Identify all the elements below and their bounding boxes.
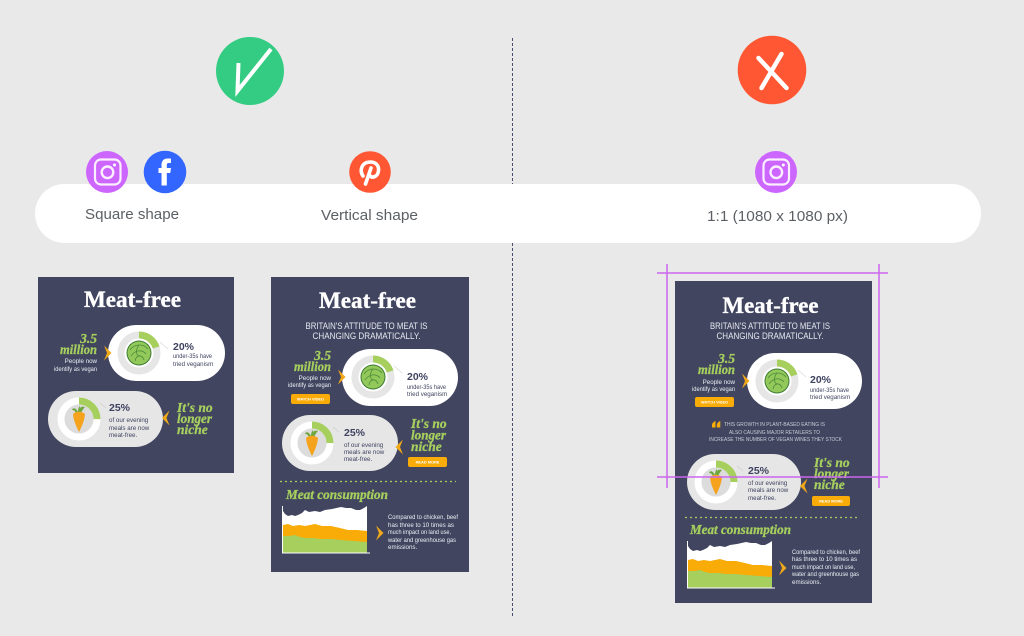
- white label band: [35, 184, 981, 243]
- card: 20 percent: [747, 353, 862, 409]
- callout: 3.5 million: [692, 351, 736, 393]
- arrow: [800, 478, 808, 494]
- card: 20 percent: [342, 349, 458, 406]
- icon: green check: [216, 37, 284, 105]
- callout: 3.5 million: identify as vegan: [692, 386, 736, 393]
- arrow: [376, 526, 384, 540]
- subheading: CHANGING DRAMATICALLY.: [716, 331, 824, 341]
- arrow: [162, 410, 170, 426]
- arrow: [779, 560, 786, 576]
- label: vertical shape: Vertical shape: [321, 208, 418, 224]
- callout: 3.5 million: million: [294, 359, 331, 374]
- callout: it's no longer niche: niche: [814, 477, 845, 492]
- panel: cropped infographic: [675, 281, 872, 603]
- panel: vertical infographic: [271, 277, 469, 572]
- text block: has three to 10 times as: [792, 556, 857, 563]
- subheading: BRITAIN'S ATTITUDE TO MEAT IS: [306, 321, 428, 331]
- subheading: CHANGING DRAMATICALLY.: [312, 331, 420, 341]
- card: 20 percent: [108, 325, 225, 381]
- button: watch video: [291, 394, 330, 404]
- text block: emissions.: [792, 579, 822, 586]
- callout: it's no longer niche: [813, 455, 850, 492]
- card: 20 percent: under-35s have: [810, 387, 850, 394]
- crop guides: [657, 264, 888, 488]
- card: 25 percent: 25%: [748, 465, 770, 477]
- card: 20 percent: under-35s have: [407, 384, 447, 391]
- pull quote: INCREASE THE NUMBER OF VEGAN WINES THEY STOCK: [709, 437, 843, 443]
- arrow: [338, 370, 346, 384]
- callout: it's no longer niche: It's no: [813, 455, 850, 470]
- pull quote: THIS GROWTH IN PLANT-BASED EATING IS: [724, 422, 826, 428]
- card: 25 percent: [48, 391, 163, 447]
- text block: Compared to chicken, beef: [388, 514, 458, 521]
- text block: emissions.: [388, 544, 418, 551]
- pull quote: [709, 421, 843, 443]
- callout: 3.5 million: [288, 348, 332, 389]
- callout: 3.5 million: People now: [703, 379, 736, 386]
- card: 25 percent: 25%: [109, 402, 131, 414]
- card: 25 percent: of our evening: [109, 417, 149, 424]
- card: 25 percent: [687, 454, 801, 510]
- label: 1:1 size: 1:1 (1080 x 1080 px): [707, 209, 848, 225]
- text block: water and greenhouse gas: [791, 571, 859, 578]
- callout: it's no longer niche: It's no: [176, 400, 213, 415]
- panel: square infographic: [38, 277, 234, 473]
- callout: 3.5 million: million: [698, 362, 735, 377]
- card: 25 percent: of our evening: [344, 442, 384, 449]
- area chart: [282, 506, 370, 553]
- callout: 3.5 million: million: [60, 342, 97, 357]
- text block: water and greenhouse gas: [387, 537, 456, 544]
- callout: it's no longer niche: [176, 400, 213, 437]
- button: watch video: [695, 397, 734, 407]
- callout: it's no longer niche: It's no: [410, 416, 447, 431]
- button: read more: READ MORE: [819, 498, 843, 504]
- callout: 3.5 million: identify as vegan: [54, 366, 98, 373]
- button: watch video: WATCH VIDEO: [701, 400, 728, 404]
- card: 25 percent: meat-free.: [344, 456, 372, 463]
- text block: has three to 10 times as: [388, 522, 454, 529]
- button: read more: [408, 457, 447, 467]
- callout: 3.5 million: 3.5: [313, 348, 331, 363]
- card: 25 percent: 25%: [344, 427, 366, 439]
- label: square shape: Square shape: [85, 207, 179, 223]
- icon: instagram left: [86, 151, 128, 193]
- callout: 3.5 million: 3.5: [79, 331, 97, 346]
- text block: [791, 549, 860, 586]
- icon: red cross: [738, 36, 806, 104]
- pull quote: ALSO CAUSING MAJOR RETAILERS TO: [729, 430, 820, 436]
- heading: Meat-free: [319, 288, 416, 313]
- text block: much impact on land use,: [792, 564, 855, 571]
- arrow: [396, 440, 403, 454]
- callout: it's no longer niche: longer: [814, 466, 850, 481]
- card: 25 percent: meals are now: [109, 425, 150, 432]
- subheading: [710, 321, 830, 341]
- centre dashed divider: [512, 38, 514, 618]
- button: read more: [812, 496, 850, 506]
- text block: Compared to chicken, beef: [792, 549, 860, 556]
- text block: much impact on land use,: [388, 529, 451, 536]
- card: 20 percent: 20%: [407, 371, 429, 383]
- arrow: [742, 374, 750, 388]
- card: 20 percent: tried veganism: [407, 391, 447, 398]
- callout: it's no longer niche: niche: [411, 439, 442, 454]
- card: 20 percent: 20%: [810, 374, 832, 386]
- callout: 3.5 million: 3.5: [717, 351, 735, 366]
- text block: [387, 514, 458, 551]
- card: 25 percent: of our evening: [748, 480, 788, 487]
- icon: pinterest: [349, 151, 391, 193]
- area chart: [688, 541, 775, 588]
- card: 20 percent: tried veganism: [810, 394, 850, 401]
- callout: it's no longer niche: longer: [411, 428, 447, 442]
- callout: it's no longer niche: [410, 416, 447, 454]
- arrow: [104, 346, 112, 360]
- card: 25 percent: [282, 415, 398, 471]
- heading: meat consumption: Meat consumption: [285, 488, 388, 503]
- callout: 3.5 million: [54, 331, 98, 373]
- subheading: BRITAIN'S ATTITUDE TO MEAT IS: [710, 321, 830, 331]
- card: 20 percent: 20%: [173, 341, 195, 353]
- button: watch video: WATCH VIDEO: [297, 396, 324, 402]
- card: 25 percent: meals are now: [344, 449, 385, 456]
- icon: facebook: [144, 151, 186, 193]
- card: 25 percent: meals are now: [748, 487, 789, 494]
- heading: meat consumption: Meat consumption: [689, 523, 791, 538]
- callout: 3.5 million: People now: [65, 358, 98, 365]
- icon: instagram right: [755, 151, 797, 193]
- callout: 3.5 million: People now: [299, 375, 332, 382]
- callout: 3.5 million: identify as vegan: [288, 382, 332, 389]
- card: 20 percent: tried veganism: [173, 361, 213, 368]
- callout: it's no longer niche: longer: [177, 411, 213, 426]
- callout: it's no longer niche: niche: [177, 422, 208, 437]
- heading: Meat-free: [722, 293, 818, 318]
- subheading: [306, 321, 428, 341]
- card: 20 percent: under-35s have: [173, 353, 213, 360]
- heading: Meat-free: [84, 287, 181, 312]
- card: 25 percent: meat-free.: [748, 495, 776, 502]
- card: 25 percent: meat-free.: [109, 432, 137, 439]
- button: read more: READ MORE: [416, 460, 440, 464]
